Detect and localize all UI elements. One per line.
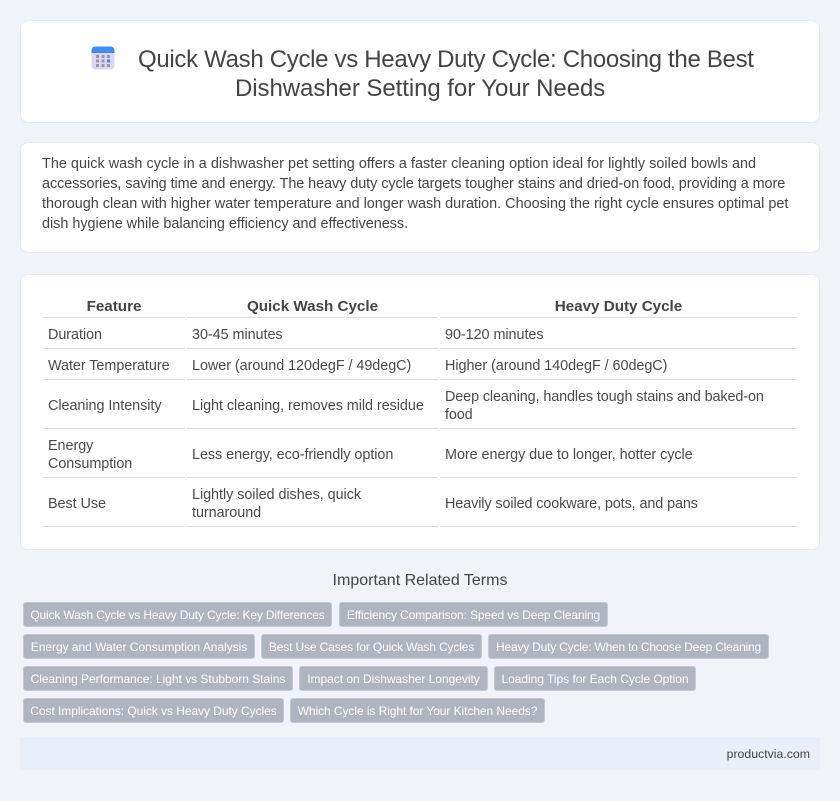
text block: intro: The quick wash cycle in a dishwasher pet setting offers a faster cleaning option ideal for lightly soiled bowls and (42, 156, 756, 172)
tag (23, 634, 255, 659)
tag: Cost Implications: Quick vs Heavy Duty Cycles (30, 704, 277, 718)
row: Energy Consumption: Consumption (48, 456, 132, 472)
cell: heavy temperature: Higher (around 140degF / 60degC) (445, 358, 667, 374)
row: Water Temperature: Water Temperature (48, 358, 170, 374)
text block: intro: accessories, saving time and energy. The heavy duty cycle targets tougher stains and dried-on food, providing a more (42, 176, 785, 192)
row: Energy Consumption: Energy (48, 438, 93, 454)
table header: Quick Wash Cycle: Quick Wash Cycle (247, 298, 378, 315)
icon: calendar (92, 46, 114, 70)
cell: quick best use: turnaround (192, 505, 261, 521)
cell: heavy energy: More energy due to longer, hotter cycle (445, 447, 693, 463)
tag: Impact on Dishwasher Longevity (307, 672, 480, 686)
title: Dishwasher Setting for Your Needs (235, 75, 605, 102)
cell: quick best use: Lightly soiled dishes, quick (192, 487, 361, 503)
cell: quick intensity: Light cleaning, removes mild residue (192, 398, 424, 414)
title (138, 46, 754, 102)
tag: Cleaning Performance: Light vs Stubborn Stains (31, 672, 285, 686)
cell: quick best use (192, 487, 361, 521)
tag: Loading Tips for Each Cycle Option (501, 672, 689, 686)
tag: Quick Wash Cycle vs Heavy Duty Cycle: Key Differences (30, 608, 325, 622)
cell: quick duration: 30-45 minutes (192, 327, 283, 343)
heading: related terms: Important Related Terms (333, 572, 507, 589)
tag (23, 666, 293, 691)
tag: Efficiency Comparison: Speed vs Deep Cleaning (347, 608, 600, 622)
panel: comparison table (20, 274, 820, 550)
panel: intro paragraph (20, 142, 820, 253)
comparison table (43, 298, 797, 527)
cell: heavy intensity (445, 389, 764, 423)
table header: Heavy Duty Cycle: Heavy Duty Cycle (555, 298, 682, 315)
table header: Feature: Feature (87, 298, 141, 315)
tag (494, 666, 696, 691)
tag: Best Use Cases for Quick Wash Cycles (269, 640, 474, 654)
cell: heavy intensity: food (445, 407, 473, 423)
tag: Energy and Water Consumption Analysis (31, 640, 247, 654)
tag (23, 698, 284, 723)
panel: header (20, 20, 820, 123)
cell: quick temperature: Lower (around 120degF / 49degC) (192, 358, 411, 374)
tag list (23, 602, 769, 723)
tag (299, 666, 488, 691)
tag (23, 602, 332, 627)
row: Energy Consumption (48, 438, 132, 472)
tag (261, 634, 482, 659)
row: Duration: Duration (48, 327, 102, 343)
tag (290, 698, 545, 723)
footer source: productvia.com (727, 747, 810, 761)
tag (488, 634, 769, 659)
cell: heavy intensity: Deep cleaning, handles tough stains and baked-on (445, 389, 764, 405)
footer (20, 737, 820, 770)
text block: intro: dish hygiene while balancing efficiency and effectiveness. (42, 216, 408, 232)
row: Cleaning Intensity: Cleaning Intensity (48, 398, 162, 414)
tag (339, 602, 608, 627)
tag: Heavy Duty Cycle: When to Choose Deep Cleaning (496, 640, 761, 654)
cell: quick energy: Less energy, eco-friendly option (192, 447, 393, 463)
text block: intro: thorough clean with higher water temperature and longer wash duration. Choosing the right cycle ensures optimal pet (42, 196, 788, 212)
text block: intro (42, 156, 788, 232)
row: Best Use: Best Use (48, 496, 106, 512)
cell: heavy best use: Heavily soiled cookware, pots, and pans (445, 496, 698, 512)
tag: Which Cycle is Right for Your Kitchen Needs? (298, 704, 537, 718)
title: Quick Wash Cycle vs Heavy Duty Cycle: Choosing the Best (138, 46, 754, 73)
cell: heavy duration: 90-120 minutes (445, 327, 544, 343)
